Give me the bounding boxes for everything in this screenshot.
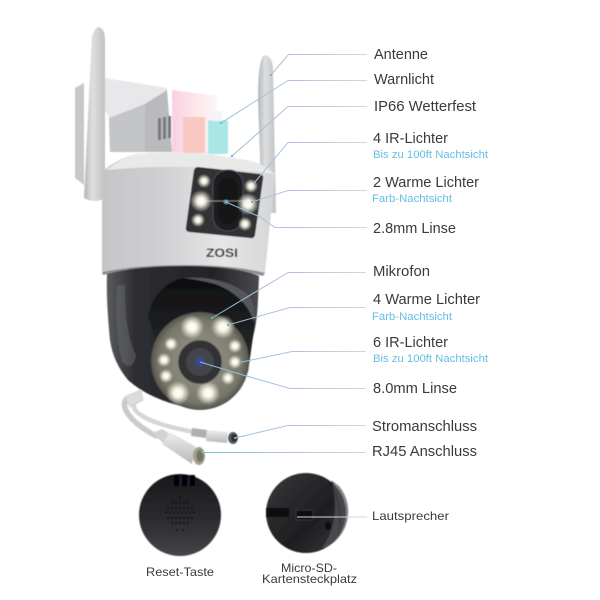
label: IP66 Wetterfest: IP66 Wetterfest (374, 98, 477, 115)
dome housing (107, 266, 259, 408)
rear mounting bracket (75, 78, 172, 185)
RJ45 connector (152, 429, 205, 465)
sublabel: Farb-Nachtsicht: Farb-Nachtsicht (372, 193, 452, 205)
logo: ZOSI (206, 248, 238, 260)
label: 6 IR-Lichter: 6 IR-Lichter (373, 334, 448, 351)
sublabel: Bis zu 100ft Nachtsicht: Bis zu 100ft Nachtsicht (373, 149, 488, 161)
camera head (102, 153, 275, 276)
label: 8.0mm Linse: 8.0mm Linse (373, 380, 457, 397)
lens panel (186, 167, 263, 238)
caption: Micro-SD- Kartensteckplatz (262, 561, 357, 586)
label: Warnlicht: Warnlicht (374, 71, 435, 88)
label: Lautsprecher: Lautsprecher (372, 509, 449, 523)
label: Mikrofon: Mikrofon (373, 263, 430, 280)
detail circle: micro-SD slot (266, 473, 348, 553)
right antenna (258, 55, 276, 213)
left antenna (84, 27, 105, 201)
label: 4 IR-Lichter: 4 IR-Lichter (373, 130, 448, 147)
callout lines (200, 54, 367, 452)
callout dots (201, 74, 272, 453)
speaker leader line (297, 516, 367, 518)
camera illustration (75, 27, 276, 465)
label: Antenne: Antenne (374, 46, 428, 63)
ball lid highlight (183, 278, 255, 322)
dome reflection (116, 285, 136, 366)
sublabel: Bis zu 100ft Nachtsicht: Bis zu 100ft Nachtsicht (373, 353, 488, 365)
main lens (178, 340, 222, 384)
label: RJ45 Anschluss: RJ45 Anschluss (372, 443, 477, 460)
sublabel: Farb-Nachtsicht: Farb-Nachtsicht (372, 311, 452, 323)
power connector (191, 428, 238, 444)
lens ring (151, 312, 249, 410)
label: 2 Warme Lichter: 2 Warme Lichter (373, 174, 479, 191)
warning light housing (172, 90, 228, 155)
label: 4 Warme Lichter: 4 Warme Lichter (373, 291, 480, 308)
label: 2.8mm Linse: 2.8mm Linse (373, 220, 456, 237)
detail circle: reset button underside (139, 474, 221, 556)
ball joint (148, 278, 255, 372)
caption: Micro-SD- Kartensteckplatz: Kartensteckplatz (262, 572, 357, 586)
ring lights (157, 315, 242, 405)
cables (124, 390, 194, 436)
caption: Micro-SD- Kartensteckplatz: Micro-SD- (281, 561, 337, 575)
label: Stromanschluss: Stromanschluss (372, 418, 477, 435)
caption: Reset-Taste: Reset-Taste (146, 565, 214, 579)
